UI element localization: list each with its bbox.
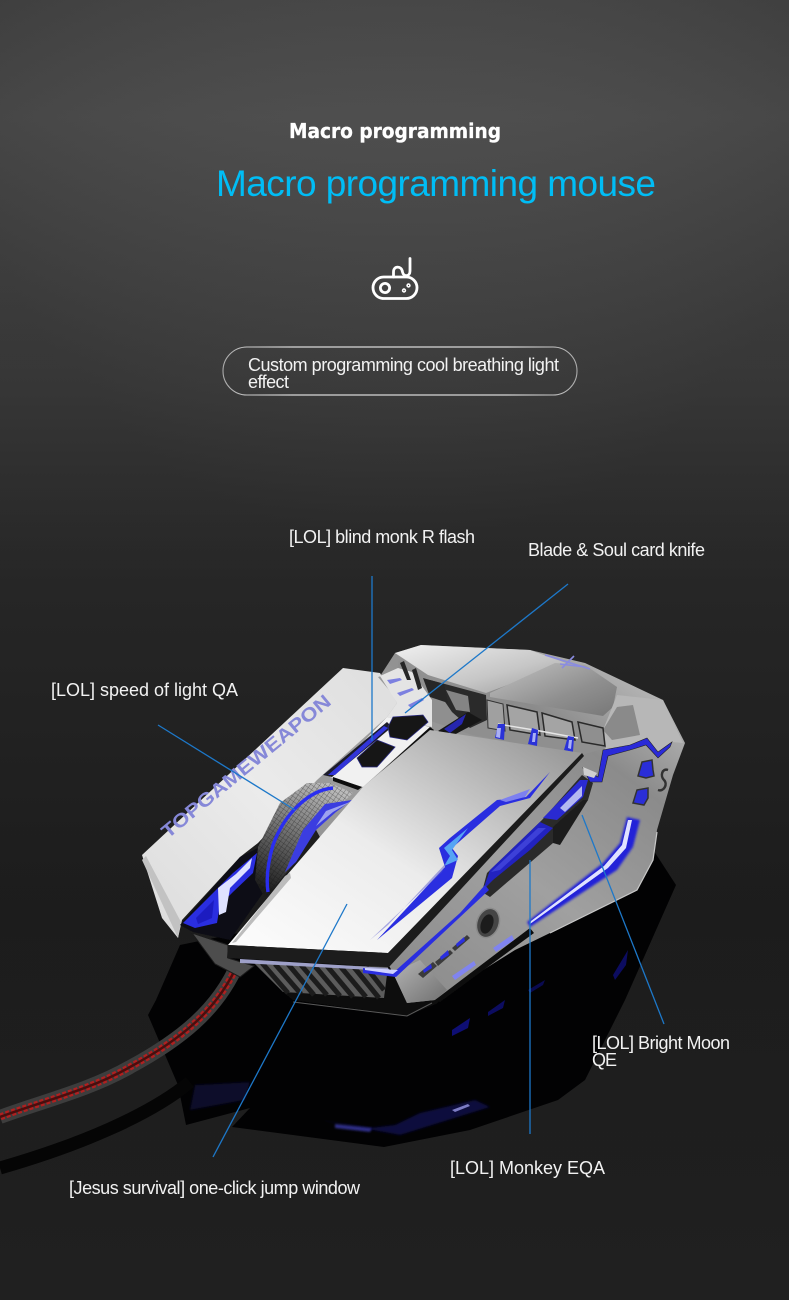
pill: feature description: effect <box>248 372 289 392</box>
mouse <box>142 645 685 1016</box>
mouse base rim <box>250 955 470 1016</box>
callout: monkey: [LOL] Monkey EQA <box>450 1158 605 1178</box>
left blue light channel <box>180 848 263 940</box>
mouse reflection <box>148 845 676 1147</box>
cable: black reflection <box>0 1082 190 1168</box>
DPI buttons <box>357 715 428 767</box>
callout: jump window: [Jesus survival] one-click jump window <box>69 1178 361 1198</box>
icon: game controller <box>373 258 417 298</box>
upper shell panels <box>395 645 683 752</box>
main title: Macro programming mouse <box>216 163 656 204</box>
pill: feature description <box>223 347 577 395</box>
side port <box>473 905 503 941</box>
callout: speed of light: [LOL] speed of light QA <box>51 680 238 700</box>
callout: bright moon <box>592 1033 730 1070</box>
front side face <box>393 960 447 1003</box>
side channel glow <box>482 775 593 897</box>
cable: red braided <box>0 963 238 1117</box>
main right button <box>227 730 584 971</box>
callout: card knife: Blade & Soul card knife <box>528 540 705 560</box>
silver body shell <box>300 645 685 1003</box>
white ledge and blue stripes by the ribs <box>380 661 448 727</box>
central channel <box>323 717 434 790</box>
rear vents <box>253 962 388 998</box>
lower edge light <box>363 885 514 980</box>
crack light <box>583 738 672 782</box>
left button panel <box>142 668 412 938</box>
pill: feature description: Custom programming cool breathing light <box>248 355 559 375</box>
callout: bright moon: [LOL] Bright Moon <box>592 1033 730 1053</box>
small heading: Macro programming <box>289 119 501 143</box>
cable collar <box>192 933 254 977</box>
rib section <box>395 660 606 755</box>
callout lines <box>158 576 664 1157</box>
callout: bright moon: QE <box>592 1050 617 1070</box>
lightning decal <box>370 772 550 940</box>
side star marks <box>633 760 668 805</box>
brand text: TOPGAMEWEAPON <box>158 691 336 843</box>
side light strip <box>527 817 640 927</box>
lower black seam <box>435 928 534 1002</box>
callout: blind monk: [LOL] blind monk R flash <box>289 527 475 547</box>
scroll wheel <box>255 783 353 898</box>
rim highlight along right edge <box>550 832 657 933</box>
